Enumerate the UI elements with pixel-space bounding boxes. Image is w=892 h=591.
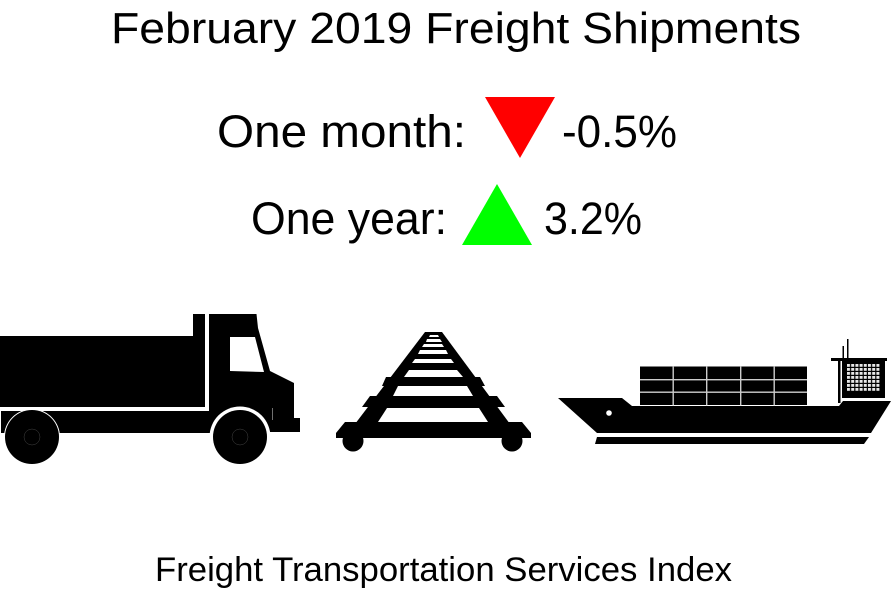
- icon: railroad track: [336, 332, 531, 452]
- one year label: One year:: [251, 193, 447, 244]
- icon: green up triangle: [462, 184, 532, 245]
- one month label: One month:: [217, 106, 466, 157]
- icon: truck: [0, 314, 302, 468]
- icon: container ship: [558, 339, 891, 444]
- one year value: 3.2%: [544, 193, 642, 244]
- icon: red down triangle: [485, 97, 555, 158]
- one month value: -0.5%: [562, 106, 677, 157]
- footer label: Freight Transportation Services Index: [155, 551, 732, 589]
- title: February 2019 Freight Shipments: [111, 4, 801, 53]
